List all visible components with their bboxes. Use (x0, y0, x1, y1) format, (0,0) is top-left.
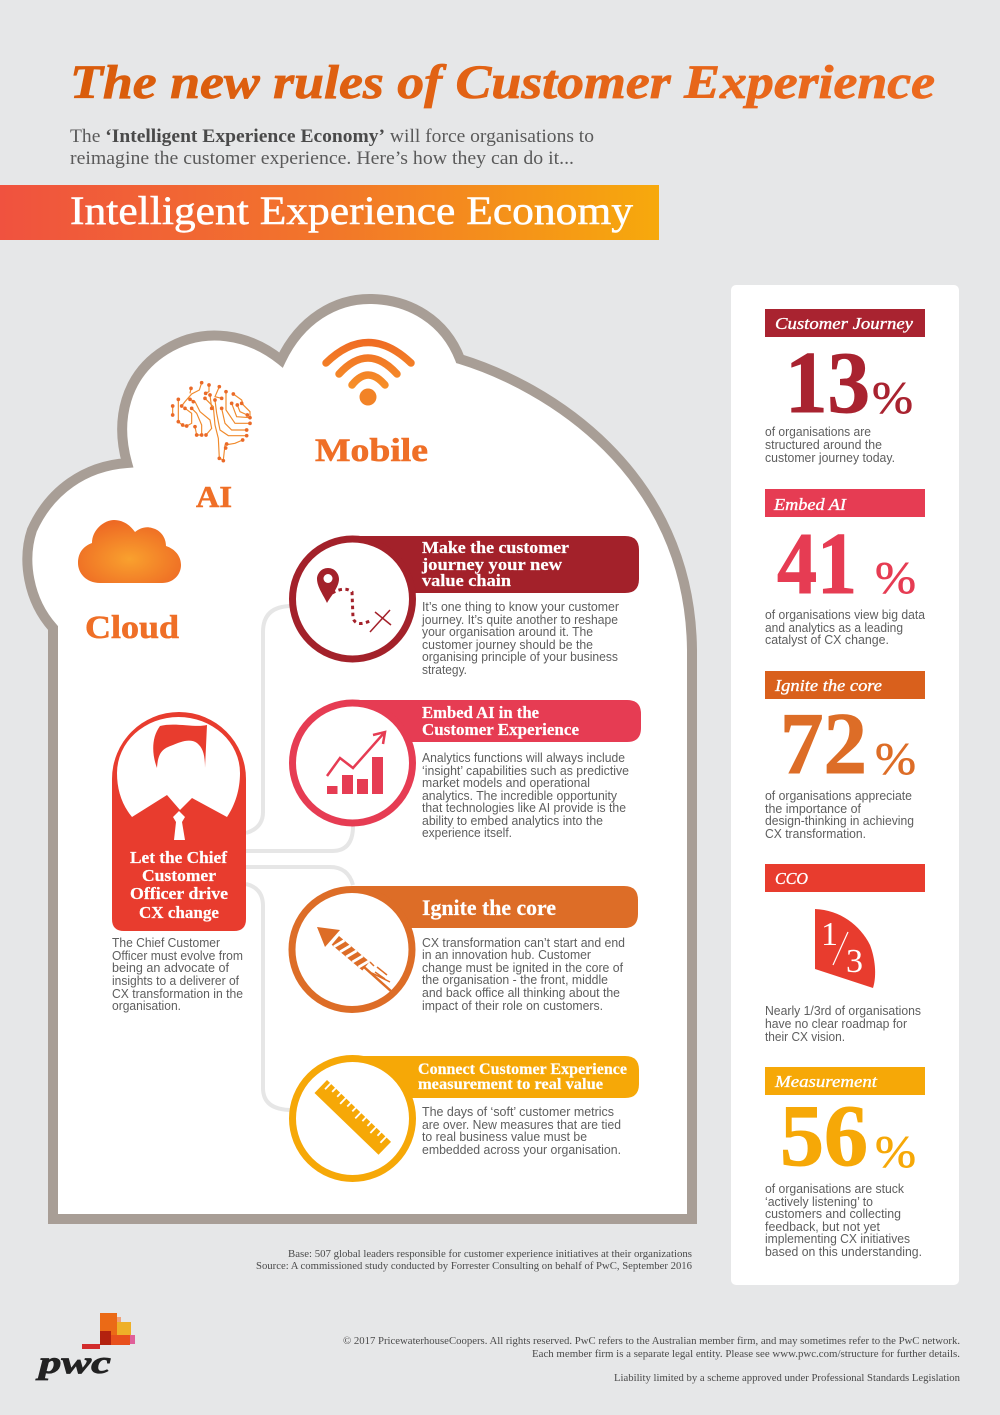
icon: pie wedge (815, 909, 875, 988)
text: base and source note: Source: A commissioned study conducted by Forrester Consulting on behalf of PwC, September 2016 (256, 1261, 692, 1272)
intro text: reimagine the customer experience. Here’s how they can do it... (70, 149, 574, 169)
panel: Embed AI (292, 700, 641, 840)
text: Chief Customer Officer description: Officer must evolve from (112, 948, 243, 963)
stat: Ignite the core 72%: % (875, 733, 916, 784)
badge heading: Officer drive (130, 884, 228, 903)
body text: that technologies like AI provide is the (422, 800, 626, 815)
body text: the organisation - the front, middle (422, 972, 608, 987)
stat: CCO one third: have no clear roadmap for (765, 1016, 908, 1031)
badge shape (112, 712, 246, 931)
label: Cloud: Cloud (85, 610, 179, 646)
logo: PwC: pwc (35, 1344, 111, 1380)
heading banner (352, 1056, 639, 1098)
heading: Connect Customer Experience (418, 1061, 627, 1078)
intro text: The ‘Intelligent Experience Economy’ will force organisations to (70, 127, 594, 147)
panel: statistics column (731, 285, 959, 1285)
text: Chief Customer Officer description: insights to a deliverer of (112, 973, 239, 988)
title: The new rules of Customer Experience (70, 56, 935, 109)
body text: journey. It’s quite another to reshape (421, 612, 618, 627)
stat: Measurement 56%: % (875, 1126, 916, 1177)
body text: change must be ignited in the core of (422, 960, 623, 975)
heading: Ignite the core (422, 895, 556, 920)
stat: Measurement 56%: 56 (780, 1088, 868, 1185)
heading (421, 538, 569, 590)
text: Chief Customer Officer description: organisation. (112, 998, 181, 1013)
text: Chief Customer Officer description: The Chief Customer (112, 935, 221, 950)
panel: Connect measurement (292, 1056, 639, 1178)
stat: Customer Journey 13%: customer journey today. (765, 450, 895, 465)
stat: Customer Journey 13%: structured around the (765, 437, 882, 452)
icon: growth chart (292, 703, 412, 823)
stat: Measurement 56%: implementing CX initiatives (765, 1231, 910, 1246)
icon: rocket (292, 890, 412, 1010)
body text: CX transformation can’t start and end (422, 935, 625, 950)
stat: Measurement 56%: customers and collecting (765, 1206, 901, 1221)
stat: Customer Journey 13%: Customer Journey (775, 314, 913, 333)
body text (422, 935, 625, 1013)
body text: analytics. The incredible opportunity (422, 788, 617, 803)
badge heading: Let the Chief (130, 848, 227, 867)
text: legal footer: Each member firm is a separate legal entity. Please see www.pwc.com/structure for further details. (532, 1349, 960, 1360)
stat: Embed AI 41%: catalyst of CX change. (765, 632, 889, 647)
stat: Ignite the core 72%: CX transformation. (765, 826, 866, 841)
heading: value chain (422, 571, 512, 590)
stat: CCO one third (765, 864, 925, 1044)
heading banner (352, 886, 638, 928)
body text: strategy. (422, 662, 467, 677)
heading banner (352, 700, 641, 742)
intro text (70, 127, 594, 169)
heading: measurement to real value (418, 1076, 603, 1093)
banner: Intelligent Experience Economy: Intelligent Experience Economy (70, 188, 633, 233)
body text: It’s one thing to know your customer (422, 599, 620, 614)
stat: Measurement 56%: ‘actively listening’ to (765, 1194, 873, 1209)
body text: are over. New measures that are tied (422, 1117, 621, 1132)
stat: Measurement 56%: based on this understanding. (765, 1244, 922, 1259)
body text: Analytics functions will always include (422, 750, 625, 765)
text: base and source note (256, 1249, 692, 1272)
body text: embedded across your organisation. (422, 1142, 621, 1157)
panel: cloud outline (27, 299, 692, 1219)
icon: pie wedge: 1 (821, 916, 838, 953)
stat: Ignite the core 72%: Ignite the core (774, 676, 882, 695)
stat: Embed AI 41%: of organisations view big data (765, 607, 926, 622)
body text: to real business value must be (422, 1129, 587, 1144)
body text (422, 750, 629, 840)
logo: PwC (35, 1313, 135, 1380)
stat: Ignite the core 72%: the importance of (765, 801, 861, 816)
body text: in an innovation hub. Customer (422, 947, 592, 962)
icon: man silhouette (117, 717, 240, 840)
stat: Measurement 56%: Measurement (774, 1072, 878, 1091)
text: Chief Customer Officer description: being an advocate of (112, 960, 229, 975)
stat: Embed AI 41%: Embed AI (773, 495, 847, 514)
heading (418, 1061, 627, 1093)
body text: market models and operational (422, 775, 590, 790)
body text: organising principle of your business (422, 649, 618, 664)
body text (422, 1104, 621, 1157)
stat: CCO one third: their CX vision. (765, 1029, 845, 1044)
text: base and source note: Base: 507 global leaders responsible for customer experience initiatives at their organizations (288, 1249, 692, 1260)
stat: Ignite the core 72%: design-thinking in achieving (765, 813, 914, 828)
body text: and back office all thinking about the (422, 985, 620, 1000)
banner: Intelligent Experience Economy (0, 185, 659, 240)
panel: Make the customer journey (292, 536, 639, 677)
stat: Ignite the core 72%: 72 (780, 696, 867, 793)
stat: CCO one third: Nearly 1/3rd of organisations (765, 1003, 921, 1018)
connector lines (246, 606, 353, 1110)
stats background (731, 285, 959, 1285)
stat: Ignite the core 72%: of organisations appreciate (765, 788, 912, 803)
badge heading (130, 848, 228, 922)
heading: journey your new (421, 555, 563, 574)
body text: ability to embed analytics into the (422, 813, 603, 828)
stat: Customer Journey 13% (765, 309, 925, 465)
panel: Ignite the core (292, 886, 638, 1013)
heading: Customer Experience (422, 720, 579, 739)
label: Mobile: Mobile (315, 433, 428, 469)
text: legal footer (343, 1336, 961, 1384)
stat: Measurement 56% (765, 1067, 925, 1259)
body text: impact of their role on customers. (422, 998, 603, 1013)
body text: your organisation around it. The (422, 624, 593, 639)
badge heading: Customer (142, 866, 216, 885)
stat: Customer Journey 13%: 13 (785, 335, 870, 432)
body text: experience itself. (422, 825, 512, 840)
text: Chief Customer Officer description (112, 935, 243, 1013)
icon: wifi (326, 342, 411, 406)
stat: Customer Journey 13%: of organisations are (765, 424, 871, 439)
icon: ruler (292, 1058, 412, 1178)
stat: Embed AI 41% (765, 489, 926, 647)
stat: Measurement 56%: feedback, but not yet (765, 1219, 880, 1234)
stat: Embed AI 41%: % (875, 552, 916, 603)
heading: Embed AI in the (422, 703, 539, 722)
heading (422, 703, 579, 739)
badge heading: CX change (139, 903, 219, 922)
body text: The days of ‘soft’ customer metrics (422, 1104, 614, 1119)
stat: Ignite the core 72% (765, 671, 925, 841)
text: legal footer: Liability limited by a scheme approved under Professional Standards Legislation (614, 1373, 961, 1384)
icon: pie wedge: 3 (846, 943, 863, 980)
icon: circuit brain (171, 381, 252, 462)
stat: Measurement 56%: of organisations are stuck (765, 1181, 904, 1196)
panel: Chief Customer Officer badge (112, 712, 246, 931)
label: AI: AI (196, 479, 232, 514)
stat: CCO one third: CCO (775, 869, 808, 888)
text: Chief Customer Officer description: CX transformation in the (112, 986, 243, 1001)
heading: Make the customer (422, 538, 569, 557)
icon: cloud (78, 520, 181, 583)
icon: map route (292, 539, 412, 659)
body text: customer journey should be the (422, 637, 593, 652)
body text (421, 599, 620, 677)
stat: Embed AI 41%: 41 (777, 516, 857, 613)
text: legal footer: © 2017 PricewaterhouseCoopers. All rights reserved. PwC refers to the Australian member firm, and may sometimes refer to the PwC network. (343, 1336, 960, 1347)
body text: ‘insight’ capabilities such as predictive (422, 763, 629, 778)
stat: Customer Journey 13%: % (872, 372, 913, 423)
heading banner (352, 536, 639, 593)
stat: Embed AI 41%: and analytics as a leading (765, 620, 903, 635)
